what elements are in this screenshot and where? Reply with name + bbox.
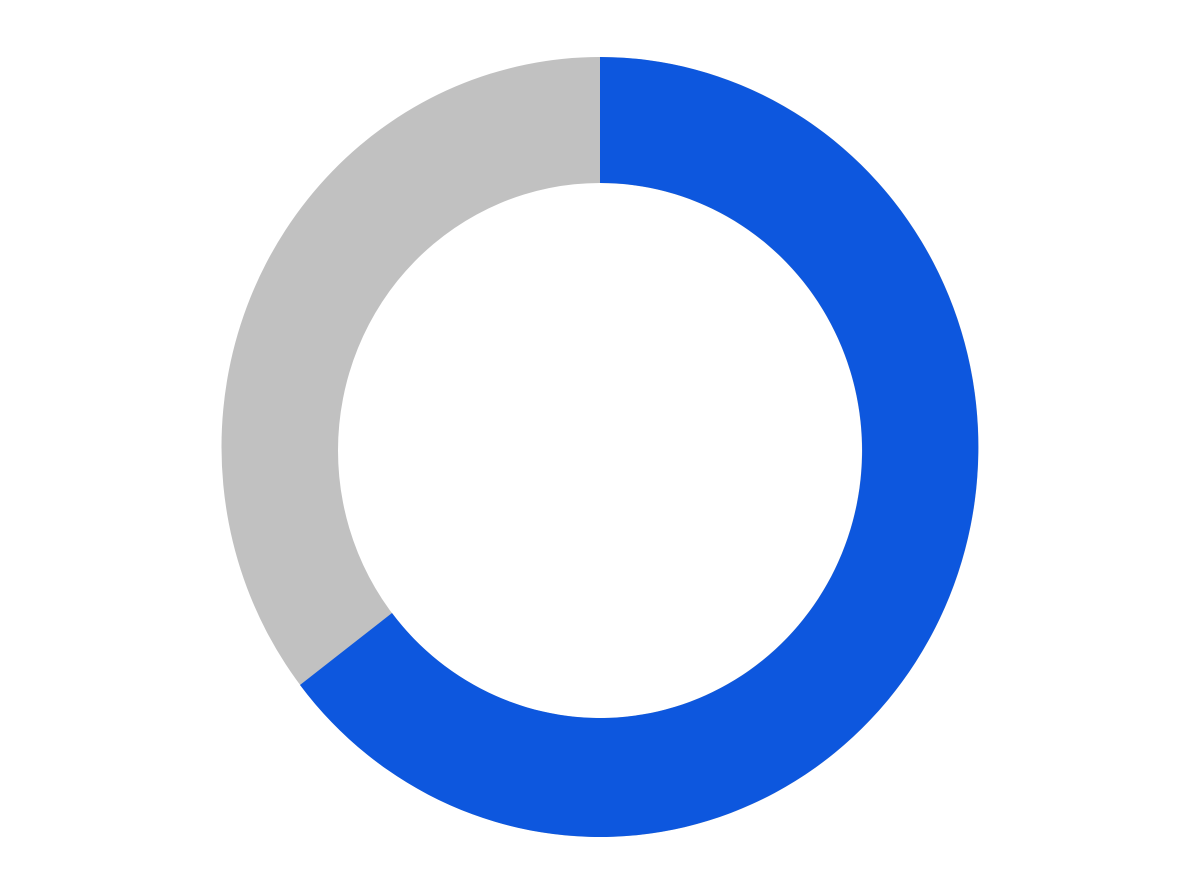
segment: blue majority (300, 57, 978, 837)
segment: gray remainder (222, 57, 979, 837)
